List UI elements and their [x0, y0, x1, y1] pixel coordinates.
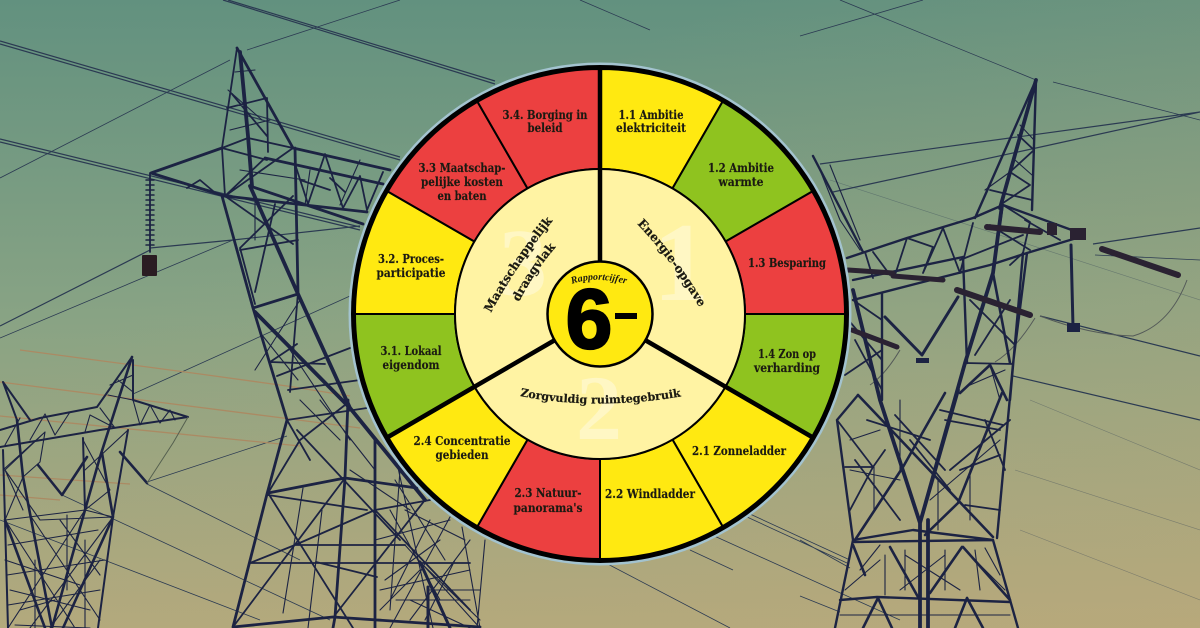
segment 2.2: 2.2 Windladder	[605, 486, 695, 501]
segment 2.3: 2.3 Natuur-	[514, 485, 582, 500]
insulator string and weight	[142, 173, 157, 276]
segment 2.3: panorama's	[514, 500, 582, 515]
segment 3.3: pelijke kosten	[421, 174, 503, 189]
score digit: 6	[566, 272, 612, 366]
segment 3.2: participatie	[376, 265, 446, 280]
segment 1.3	[726, 192, 845, 314]
outer ring	[348, 62, 852, 566]
segment 3.1: 3.1. Lokaal	[380, 343, 442, 358]
segment 3.4: 3.4. Borging in	[502, 107, 588, 122]
segment 3.3	[388, 102, 528, 242]
segment 1.1: elektriciteit	[616, 120, 686, 135]
insulator strings	[848, 223, 1178, 363]
heading: Energie-opgave: Energie-opgave	[637, 218, 704, 306]
segment 1.2	[672, 102, 812, 242]
centre score badge	[546, 260, 654, 368]
heading: Zorgvuldig ruimtegebruik: Zorgvuldig ruimtegebruik	[520, 388, 682, 406]
inner ring	[455, 169, 745, 459]
segment 1.4: 1.4 Zon op	[758, 346, 816, 361]
segment 1.2: 1.2 Ambitie	[708, 160, 774, 175]
segment 1.4	[726, 314, 845, 436]
segment 1.3: 1.3 Besparing	[748, 255, 826, 270]
segment 3.2	[355, 192, 474, 314]
heading: Maatschappelijk: Maatschappelijk	[483, 217, 553, 313]
pylon: far left small	[0, 357, 188, 628]
segment 3.3: en baten	[438, 188, 486, 203]
spokes dividing the three themes	[388, 69, 812, 437]
segment 3.1: eigendom	[382, 357, 440, 372]
segment 1.1: 1.1 Ambitie	[618, 107, 684, 122]
rating wheel	[348, 62, 852, 566]
segment 1.1	[600, 69, 722, 188]
pylon: large left	[142, 48, 485, 628]
segment 3.4: beleid	[528, 120, 563, 135]
segment 2.4	[388, 386, 528, 526]
pylon: right	[813, 80, 1187, 628]
score label: Rapportcijfer	[571, 274, 628, 284]
faint numeral 3: 3	[499, 209, 547, 316]
segment 2.2	[600, 440, 722, 559]
segment 3.3: 3.3 Maatschap-	[418, 160, 506, 175]
heading: draagvlak: draagvlak	[512, 243, 556, 301]
segment 2.3	[478, 440, 600, 559]
segment 3.1	[355, 314, 474, 436]
faint numeral 1: 1	[653, 201, 709, 325]
segment 2.4: gebieden	[436, 447, 488, 462]
segment 1.2: warmte	[718, 174, 764, 189]
segment 3.4	[478, 69, 600, 188]
score minus	[615, 313, 637, 319]
segment 3.2: 3.2. Proces-	[378, 251, 444, 266]
segment 2.1: 2.1 Zonneladder	[692, 443, 786, 458]
segment 2.1	[672, 386, 812, 526]
conductor jumpers	[870, 280, 1187, 385]
segment 1.4: verharding	[753, 360, 820, 375]
segment 2.4: 2.4 Concentratie	[414, 433, 511, 448]
faint numeral 2: 2	[576, 357, 622, 459]
